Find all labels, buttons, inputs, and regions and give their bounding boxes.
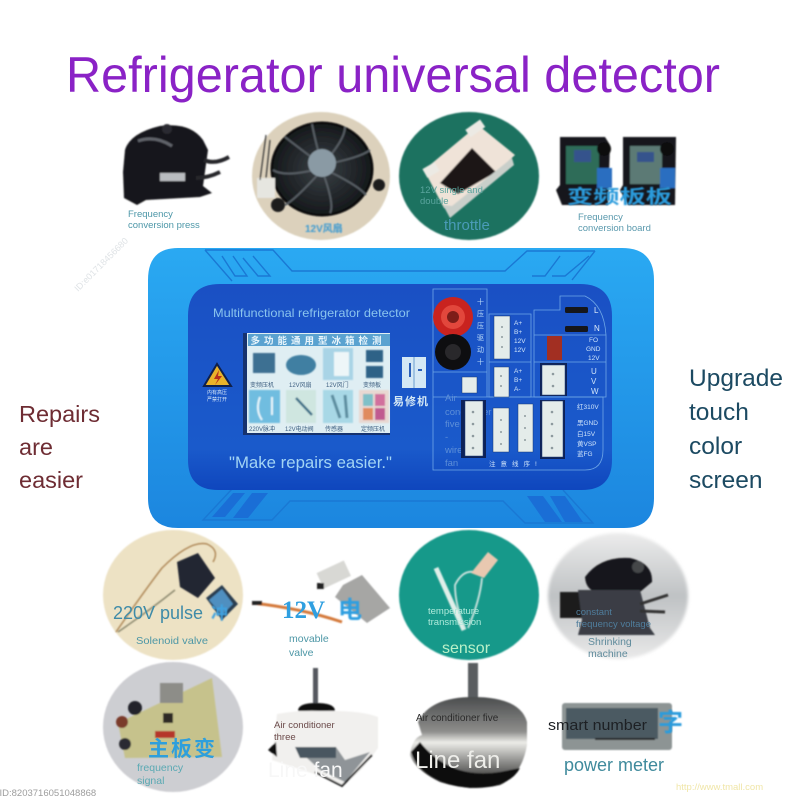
label: 12V single and double: double bbox=[420, 196, 449, 207]
binding posts bbox=[433, 297, 473, 370]
label: air conditioner three: Air conditioner bbox=[274, 720, 335, 731]
panel heading: Multifunctional refrigerator detector bbox=[213, 306, 410, 320]
screen tile captions: 变频板 bbox=[363, 381, 381, 389]
label: 12V electric tag: 12V bbox=[282, 597, 325, 624]
label: smart number: smart number bbox=[548, 718, 647, 734]
side text: upgrade touch color screen: Upgrade bbox=[689, 365, 783, 392]
label: air conditioner three: three bbox=[274, 732, 296, 743]
device outer shell bbox=[148, 248, 654, 528]
label: frequency conversion board: conversion board bbox=[578, 223, 651, 234]
connector pin labels: U bbox=[591, 367, 597, 376]
watermark: right: http://www.tmall.com bbox=[676, 782, 763, 793]
white connectors bbox=[461, 316, 567, 459]
watermark: diagonal id: ID:e01718456680 bbox=[72, 236, 130, 293]
label: sensor: sensor bbox=[442, 640, 491, 657]
connector pin labels: A- bbox=[514, 386, 520, 393]
item: temperature sensor bbox=[399, 530, 539, 660]
slogan: "Make repairs easier." bbox=[229, 454, 392, 472]
touch screen bbox=[243, 333, 390, 435]
warning icon: 内有高压 bbox=[207, 389, 227, 396]
item: three-wire AC fan motor bbox=[268, 668, 378, 786]
side text: upgrade touch color screen: screen bbox=[689, 467, 763, 494]
label: frequency conversion press: conversion press bbox=[128, 220, 200, 231]
connector pin labels: GND bbox=[586, 346, 601, 353]
connector pin labels: A+ bbox=[514, 368, 522, 375]
label: shrinking machine: Shrinking bbox=[588, 636, 632, 648]
post side labels: 压 bbox=[477, 322, 484, 330]
screen title: 多功能通用型冰箱检测 bbox=[250, 335, 386, 347]
fridge icon: 易修机 bbox=[393, 394, 429, 408]
label: frequency signal: frequency bbox=[137, 762, 184, 774]
overlay label: air conditioner five-wire fan: conditioner bbox=[445, 407, 491, 418]
label: constant frequency voltage: frequency voltage bbox=[576, 619, 651, 630]
item: solenoid valve bbox=[103, 530, 243, 660]
L N jumpers bbox=[565, 306, 600, 333]
watermark: left id: ID:8203716051048868 bbox=[0, 788, 96, 799]
screen tile captions: 传感器 bbox=[325, 425, 343, 433]
connector pin labels: 注意线序! bbox=[489, 459, 542, 468]
item: frequency conversion board bbox=[556, 137, 676, 234]
label: throttle: throttle bbox=[444, 217, 490, 234]
label: power meter: power meter bbox=[564, 755, 664, 775]
post side labels: 动 bbox=[477, 345, 484, 354]
connector panel outlines bbox=[433, 289, 606, 470]
label: temperature transmission: temperature bbox=[428, 606, 479, 617]
screen tile captions: 变频压机 bbox=[250, 381, 274, 389]
connector pin labels: A+ bbox=[514, 320, 522, 327]
connector pin labels: 蓝FG bbox=[577, 449, 593, 458]
label: 12V single and double: 12V single and bbox=[420, 185, 483, 196]
side text: repairs are easier: are bbox=[19, 434, 53, 460]
device inner panel bbox=[188, 284, 612, 490]
side text: repairs are easier: Repairs bbox=[19, 401, 100, 427]
L N jumpers: L bbox=[594, 306, 599, 315]
screen tile captions: 12V电动阀 bbox=[285, 425, 314, 433]
item: frequency conversion compressor bbox=[123, 124, 229, 231]
connector pin labels: 12V bbox=[588, 355, 600, 362]
label: shrinking machine: machine bbox=[588, 648, 628, 660]
screen tile captions bbox=[249, 381, 385, 433]
connector pin labels: FO bbox=[589, 337, 598, 344]
connector pin labels: B+ bbox=[514, 377, 522, 384]
item: movable valve bbox=[252, 561, 390, 659]
connector pin labels: 黑GND bbox=[577, 419, 598, 427]
screen tile captions: 220V脉冲 bbox=[249, 425, 275, 433]
device: multifunctional refrigerator detector bbox=[148, 248, 654, 528]
label: line fan: Line fan bbox=[415, 747, 500, 774]
screen tiles bbox=[249, 348, 389, 423]
item: throttle bbox=[399, 112, 539, 240]
label: frequency signal: signal bbox=[137, 775, 164, 787]
post side labels: 十 bbox=[477, 357, 484, 366]
screen tile captions: 12V风扇 bbox=[289, 381, 312, 389]
item: constant frequency compressor bbox=[548, 533, 688, 660]
label: solenoid valve: Solenoid valve bbox=[136, 635, 208, 647]
connector pin labels bbox=[489, 320, 601, 468]
label: line fan: Line fan bbox=[268, 759, 343, 782]
overlay label: air conditioner five-wire fan: wire bbox=[444, 445, 462, 456]
corner bevels bbox=[203, 250, 595, 523]
label: blue Chinese tag on board: 主板变 bbox=[148, 737, 217, 761]
connector pin labels: B+ bbox=[514, 329, 522, 336]
label: air conditioner five: Air conditioner five bbox=[416, 713, 499, 724]
side text: repairs are easier: easier bbox=[19, 467, 83, 493]
item: five-wire AC fan motor bbox=[410, 663, 527, 788]
red connector bbox=[547, 336, 562, 360]
post side labels: 驱 bbox=[477, 334, 484, 342]
label: temperature transmission: transmission bbox=[428, 617, 481, 628]
post side labels: 压 bbox=[477, 310, 484, 318]
connector pin labels: 12V bbox=[514, 347, 526, 354]
label: blue tag: 字 bbox=[658, 709, 683, 737]
screen tile captions: 12V风门 bbox=[326, 381, 349, 389]
item: frequency signal board bbox=[103, 662, 243, 792]
connector pin labels: 12V bbox=[514, 338, 526, 345]
label: blue Chinese tag on fan: 12V风扇 bbox=[305, 222, 343, 235]
item: smart digital power meter bbox=[548, 703, 683, 775]
connector pin labels: 红310V bbox=[577, 402, 599, 411]
title: Refrigerator universal detector bbox=[66, 47, 720, 103]
overlay label: air conditioner five-wire fan: Air bbox=[445, 393, 457, 404]
connector pin labels: 白15V bbox=[577, 429, 596, 438]
fridge icon bbox=[393, 357, 429, 408]
overlay label: air conditioner five-wire fan: fan bbox=[445, 458, 458, 469]
connector pin labels: V bbox=[591, 377, 597, 386]
label: constant frequency voltage: constant bbox=[576, 607, 612, 618]
overlay label: air conditioner five-wire fan: - bbox=[445, 432, 448, 443]
label: blue Chinese tag on board: 变频板板 bbox=[567, 185, 672, 208]
connector pin labels: 黄VSP bbox=[577, 439, 597, 448]
warning icon: 严禁打开 bbox=[207, 396, 227, 403]
item: 12V fan bbox=[252, 112, 390, 240]
label: 220V pulse: 220V pulse bbox=[113, 603, 203, 623]
label: frequency conversion board: Frequency bbox=[578, 212, 623, 223]
side text: upgrade touch color screen: color bbox=[689, 433, 742, 460]
label: frequency conversion press: Frequency bbox=[128, 209, 173, 220]
label: electric character: 电 bbox=[338, 597, 362, 624]
overlay label: air conditioner five-wire fan: five bbox=[445, 419, 460, 430]
screen tile captions: 定频压机 bbox=[361, 425, 385, 433]
side text: upgrade touch color screen: touch bbox=[689, 399, 749, 426]
L N jumpers: N bbox=[594, 324, 600, 333]
connector pin labels: W bbox=[591, 387, 599, 396]
label: movable valve: valve bbox=[289, 647, 314, 659]
warning icon bbox=[204, 364, 231, 403]
post side labels: 十 bbox=[477, 297, 484, 306]
label: blue tag: 冲 bbox=[211, 604, 228, 623]
label: movable valve: movable bbox=[289, 633, 329, 645]
